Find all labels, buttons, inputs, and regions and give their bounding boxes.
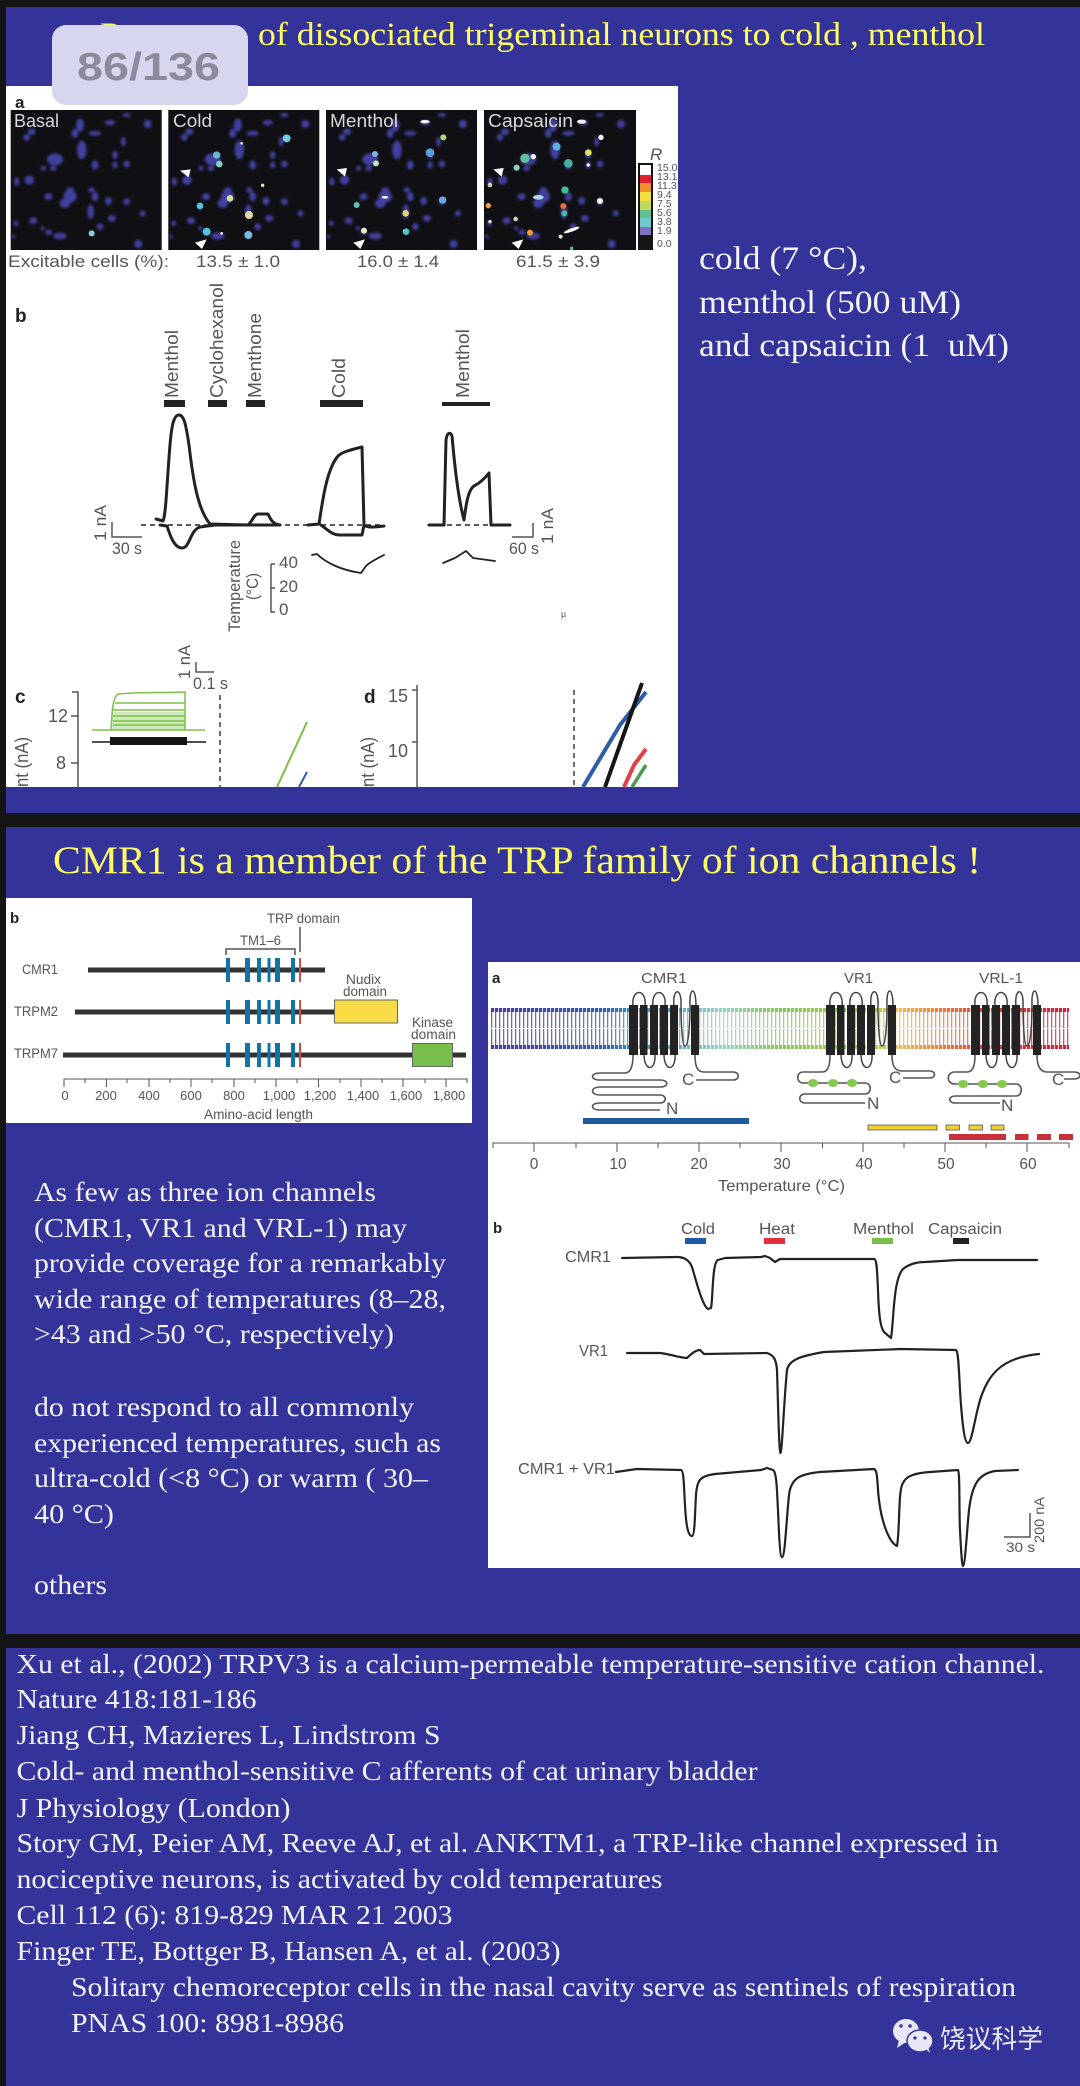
reference list: J Physiology (London) — [16, 1793, 290, 1823]
excitable cell percentages: 13.5 ± 1.0 — [196, 252, 280, 271]
channel VR1: C — [889, 1068, 901, 1087]
channel labels — [641, 970, 1023, 987]
activation range bars — [583, 1118, 1073, 1140]
channel VRL-1: N — [1001, 1096, 1013, 1115]
icon: wechat logo — [893, 2019, 933, 2053]
reference list: Cold- and menthol-sensitive C afferents of cat urinary bladder — [16, 1756, 758, 1786]
protein backbones — [63, 968, 466, 1058]
scale bars and temperature axis: 0.1 s — [193, 674, 228, 693]
reference list: Nature 418:181-186 — [16, 1684, 256, 1714]
stimulus labels and bars: Menthol — [453, 329, 473, 398]
colour scale bar: 3.8 — [657, 216, 672, 228]
stimulus legend: Capsaicin — [928, 1221, 1002, 1238]
scale bars and temperature axis: 1 nA — [538, 507, 557, 544]
slide 3 background — [6, 1648, 1080, 2086]
scale bars and temperature axis: 20 — [279, 577, 298, 596]
domain annotations: CMR1 — [22, 962, 58, 977]
amino-acid axis: 1,400 — [347, 1088, 379, 1103]
recording labels: CMR1 + VR1 — [518, 1461, 615, 1478]
colour scale bar: 9.4 — [657, 189, 672, 201]
text: others: others — [34, 1570, 107, 1600]
colour scale bar: 7.5 — [657, 198, 672, 210]
recording scale bar — [1004, 1496, 1047, 1555]
text: temperature coverage: >43 and >50 °C, respectively) — [34, 1319, 394, 1349]
panel letter a: a — [15, 93, 25, 112]
slide counter badge: 86/136 — [77, 46, 220, 89]
text: uncovered temperatures — [34, 1392, 441, 1529]
colour scale bar — [638, 145, 678, 250]
stimulus legend: Heat — [759, 1221, 796, 1238]
reference list: Cell 112 (6): 819-829 MAR 21 2003 — [16, 1900, 452, 1930]
reference list: Jiang CH, Mazieres L, Lindstrom S — [16, 1720, 440, 1750]
colour scale bar: 15.0 — [657, 162, 678, 174]
temperature axis: 60 — [1019, 1156, 1037, 1173]
colour scale bar: R — [650, 145, 662, 164]
slide 1 title: Responses — [100, 17, 240, 53]
amino-acid axis: 1,200 — [304, 1088, 336, 1103]
text: uncovered temperatures: do not respond to all commonly — [34, 1392, 415, 1422]
recording scale bar: 30 s — [1006, 1539, 1035, 1555]
plot c — [12, 687, 307, 787]
amino-acid axis: 1,800 — [433, 1088, 465, 1103]
reference list: Finger TE, Bottger B, Hansen A, et al. (2003) — [16, 1936, 560, 1966]
plot c: nt (nA) — [12, 737, 32, 787]
kinase domain box — [412, 1044, 452, 1066]
slide 1 — [6, 7, 1080, 813]
figure panel: domain structure — [6, 898, 472, 1123]
domain annotations: TRPM2 — [14, 1004, 58, 1019]
plot c: c — [15, 687, 26, 708]
plot d: 10 — [388, 741, 408, 761]
excitable cell percentages: Excitable cells (%): — [8, 252, 169, 271]
channel VR1: N — [867, 1094, 879, 1113]
imaging panels — [11, 110, 636, 250]
slide 2 title: CMR1 is a member of the TRP family of ion channels ! — [53, 839, 981, 882]
channel VRL-1 — [948, 991, 1080, 1115]
figure panel: calcium imaging and currents — [6, 86, 678, 787]
temperature axis: Temperature (°C) — [718, 1178, 845, 1195]
temperature axis: 50 — [937, 1156, 955, 1173]
plot c: 12 — [48, 706, 68, 726]
scale bars and temperature axis: (°C) — [243, 573, 262, 600]
scale bars and temperature axis: Temperature — [225, 540, 244, 632]
stimulus labels and bars: Cyclohexanol — [207, 283, 227, 398]
text: temperature coverage: As few as three ion channels — [34, 1177, 376, 1207]
imaging panels: Basal — [14, 111, 59, 131]
excitable cell percentages: 61.5 ± 3.9 — [516, 252, 600, 271]
stimulus labels and bars: Menthol — [162, 330, 182, 398]
colour scale bar: 1.9 — [657, 225, 672, 237]
domain annotations: Kinase — [412, 1015, 453, 1030]
colour scale bar: 13.1 — [657, 171, 678, 183]
temperature axis: 30 — [773, 1156, 791, 1173]
recording trace CMR1 — [622, 1256, 1037, 1338]
plot d — [358, 683, 646, 787]
domain annotations: Nudix — [346, 972, 381, 987]
stimulus labels and bars: Cold — [329, 358, 349, 398]
stimulus conditions text: and capsaicin (1 uM) — [699, 328, 1009, 364]
recording trace CMR1 + VR1 — [616, 1468, 1018, 1566]
stimulus labels and bars: Menthone — [245, 313, 265, 398]
scale bars and temperature axis: 30 s — [112, 539, 142, 558]
temperature axis: 40 — [855, 1156, 873, 1173]
excitable cell percentages — [8, 252, 600, 271]
plot d: d — [364, 687, 376, 708]
recording labels — [518, 1249, 615, 1478]
recording scale bar: 200 nA — [1031, 1496, 1047, 1543]
domain annotations: TM1–6 — [240, 933, 281, 948]
panel letter a: a — [492, 970, 501, 987]
recording trace VR1 — [627, 1349, 1039, 1453]
reference list: PNAS 100: 8981-8986 — [71, 2008, 344, 2038]
current traces — [141, 415, 510, 573]
domain annotations: TRPM7 — [14, 1046, 58, 1061]
temperature axis — [493, 1143, 1069, 1195]
plot c: 8 — [56, 753, 66, 773]
text: temperature coverage: (CMR1, VR1 and VRL-1) may — [34, 1213, 408, 1243]
amino-acid axis: 1,000 — [263, 1088, 295, 1103]
scale bars and temperature axis: 60 s — [509, 539, 539, 558]
recording labels: VR1 — [579, 1343, 608, 1360]
watermark text: 饶议科学 — [940, 2024, 1043, 2054]
stimulus conditions text: menthol (500 uM) — [699, 285, 961, 321]
amino-acid axis: 600 — [180, 1088, 202, 1103]
plot d: 15 — [388, 686, 408, 706]
channel labels: VR1 — [844, 970, 873, 987]
text: uncovered temperatures: ultra-cold (<8 °C) or warm ( 30– — [34, 1463, 429, 1493]
domain annotations: domain — [343, 984, 387, 999]
stimulus legend — [681, 1221, 1002, 1244]
scale bars and temperature axis: 1 nA — [175, 644, 194, 679]
channel CMR1: N — [666, 1099, 678, 1118]
temperature axis: 20 — [690, 1156, 708, 1173]
stimulus conditions text — [699, 241, 1009, 364]
recording labels: CMR1 — [565, 1249, 611, 1266]
domain annotations: domain — [411, 1027, 456, 1042]
colour scale bar: 0.0 — [657, 238, 672, 250]
slide 1 background — [6, 7, 1080, 813]
panel letter b: b — [493, 1220, 502, 1237]
imaging panels: Capsaicin — [488, 111, 573, 131]
membrane temperature band — [491, 1010, 1069, 1047]
panel letter b: b — [15, 306, 27, 327]
slide 1 title: of dissociated trigeminal neurons to cold , menthol — [258, 17, 985, 53]
scale bars and temperature axis — [91, 504, 566, 693]
scale bars and temperature axis: 1 nA — [91, 504, 110, 541]
stimulus legend: Menthol — [853, 1221, 914, 1238]
channel CMR1 — [592, 991, 738, 1118]
imaging panels: Menthol — [330, 111, 398, 131]
amino-acid axis: 1,600 — [390, 1088, 422, 1103]
stimulus legend: Cold — [681, 1221, 715, 1238]
slide counter badge — [52, 25, 248, 105]
domain annotations: TRP domain — [267, 911, 340, 926]
excitable cell percentages: 16.0 ± 1.4 — [357, 252, 439, 271]
slide 2 — [6, 827, 1080, 1634]
text: uncovered temperatures: 40 °C) — [34, 1499, 114, 1529]
figure panel: channels and recordings — [488, 962, 1080, 1568]
slide 3 — [6, 1648, 1080, 2086]
colour scale bar: 11.3 — [657, 180, 677, 192]
stimulus conditions text: cold (7 °C), — [699, 241, 867, 277]
nudix domain box — [334, 1000, 398, 1023]
temperature axis: 10 — [609, 1156, 627, 1173]
domain annotations — [14, 911, 456, 1061]
amino-acid axis: 400 — [138, 1088, 160, 1103]
temperature axis: 0 — [530, 1156, 539, 1173]
text: temperature coverage — [34, 1177, 447, 1349]
amino-acid axis: 0 — [61, 1088, 69, 1103]
reference list: nociceptive neurons, is activated by cold temperatures — [16, 1864, 662, 1894]
transmembrane segments — [226, 958, 301, 1067]
slide 2 background — [6, 827, 1080, 1634]
plot d: nt (nA) — [358, 737, 378, 787]
channel labels: CMR1 — [641, 970, 687, 987]
amino-acid axis — [61, 1079, 467, 1122]
channel CMR1: C — [682, 1070, 694, 1089]
scale bars and temperature axis: µ — [561, 609, 566, 619]
reference list: Xu et al., (2002) TRPV3 is a calcium-permeable temperature-sensitive cation channel. — [16, 1649, 1044, 1679]
reference list — [16, 1649, 1044, 2038]
channel VRL-1: C — [1052, 1070, 1064, 1089]
imaging panels: Cold — [173, 111, 212, 131]
channel VR1 — [798, 991, 934, 1113]
channel labels: VRL-1 — [979, 970, 1023, 987]
panel letter b: b — [10, 910, 19, 927]
text: temperature coverage: provide coverage for a remarkably — [34, 1248, 447, 1278]
amino-acid axis: 800 — [223, 1088, 245, 1103]
text: temperature coverage: wide range of temperatures (8–28, — [34, 1284, 446, 1314]
amino-acid axis: 200 — [95, 1088, 117, 1103]
amino-acid axis: Amino-acid length — [204, 1107, 313, 1122]
scale bars and temperature axis: 0 — [279, 600, 288, 619]
reference list: Solitary chemoreceptor cells in the nasal cavity serve as sentinels of respiration — [71, 1972, 1017, 2002]
scale bars and temperature axis: 40 — [279, 553, 298, 572]
colour scale bar: 5.6 — [657, 207, 672, 219]
reference list: Story GM, Peier AM, Reeve AJ, et al. ANKTM1, a TRP-like channel expressed in — [16, 1828, 999, 1858]
stimulus labels and bars — [162, 283, 490, 407]
text: uncovered temperatures: experienced temperatures, such as — [34, 1428, 441, 1458]
